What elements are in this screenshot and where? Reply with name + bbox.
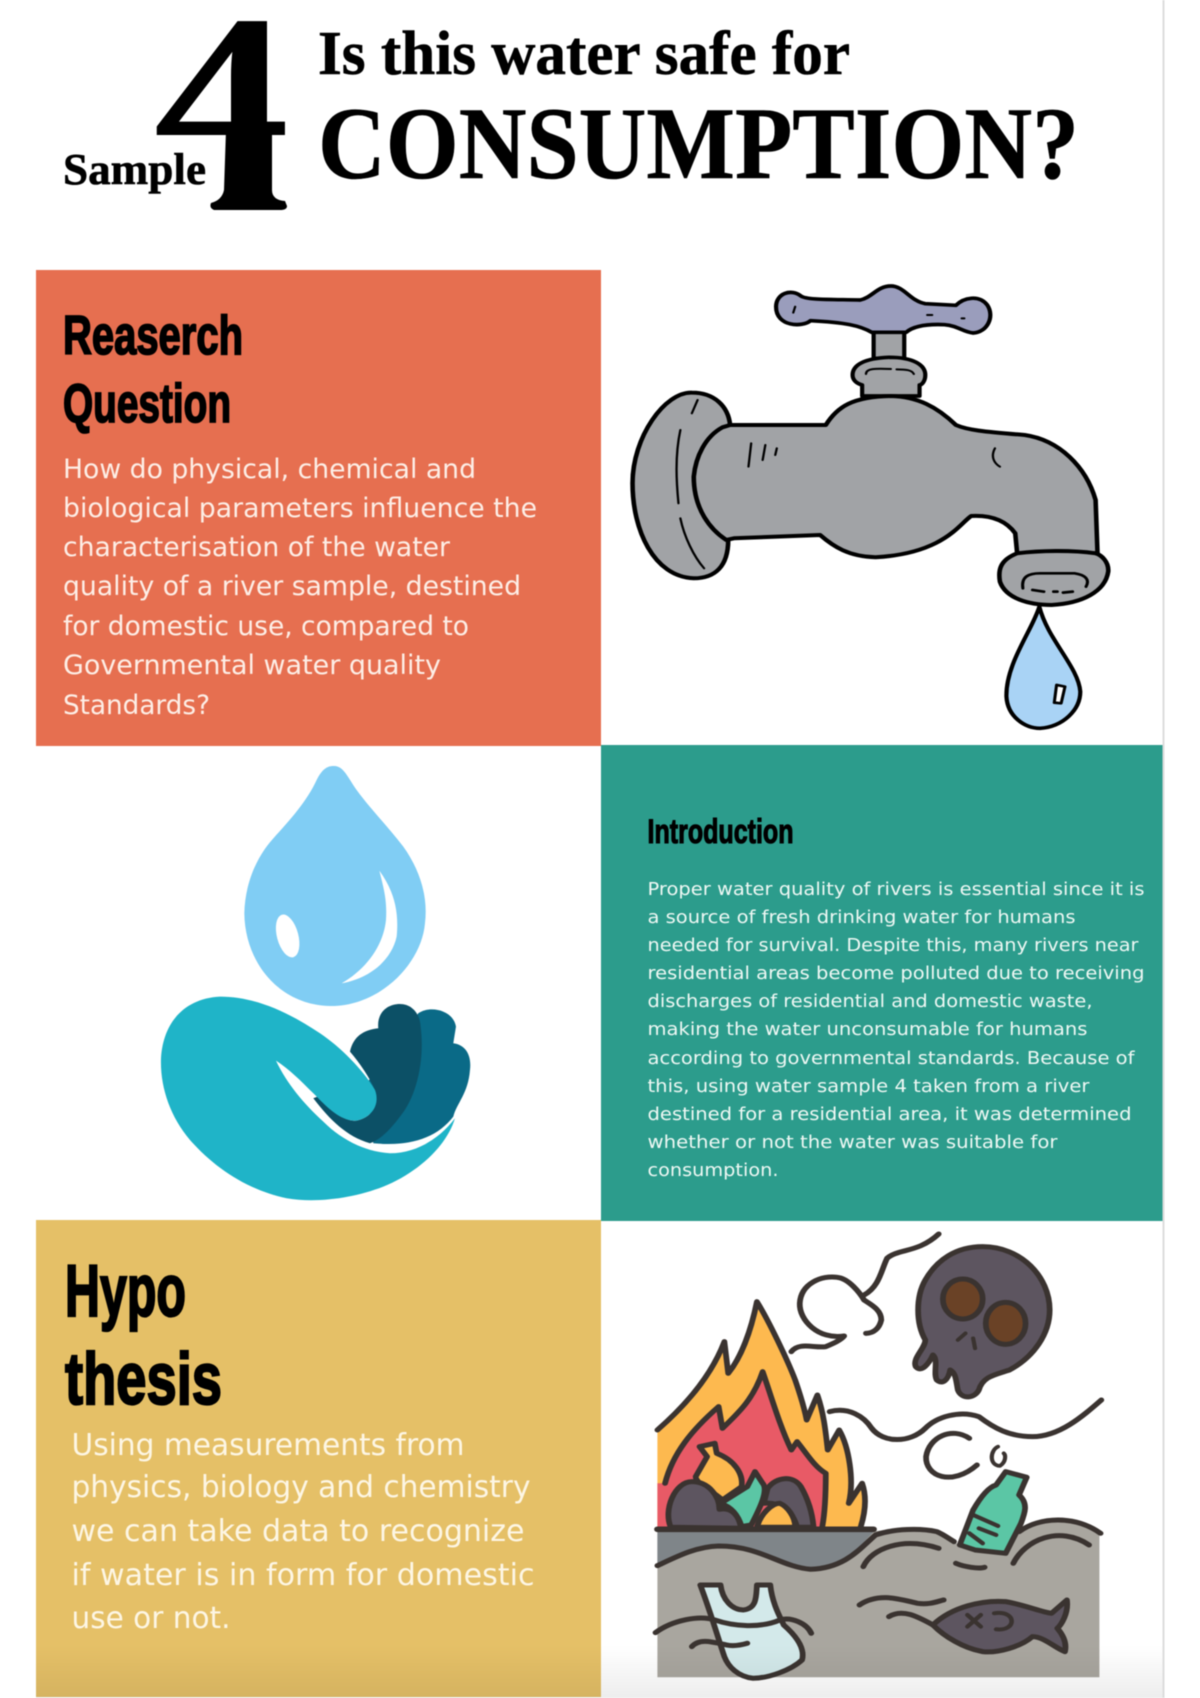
heading: hypothesis: thesis: [65, 1339, 222, 1420]
text block: hypothesis: use or not.: [72, 1601, 230, 1636]
text block: introduction: according to governmental standards. Because of: [648, 1048, 1135, 1069]
icon: water drop over hand: [161, 766, 470, 1200]
text block: hypothesis: [72, 1428, 534, 1636]
text block: introduction: needed for survival. Despite this, many rivers near: [648, 935, 1139, 956]
panel: research question: [36, 270, 601, 746]
text block: introduction: making the water unconsumable for humans: [648, 1019, 1088, 1040]
text block: hypothesis: if water is in form for domestic: [72, 1558, 534, 1593]
label: Sample: Sample: [63, 145, 206, 194]
heading: research question: Question: [63, 372, 231, 434]
polluted water: [657, 1518, 1101, 1677]
icon: dripping tap: [633, 286, 1108, 728]
text block: research question: How do physical, chemical and: [63, 454, 476, 485]
text block: research question: biological parameters influence the: [63, 493, 537, 524]
cupped hand: [161, 997, 470, 1200]
heading: hypothesis: Hypo: [65, 1251, 186, 1332]
panel: introduction: [601, 745, 1162, 1221]
floating bottle: [960, 1472, 1027, 1553]
heading: research question: [63, 304, 243, 434]
text block: introduction: this, using water sample 4 taken from a river: [648, 1076, 1090, 1097]
text block: research question: Governmental water quality: [63, 650, 441, 681]
text block: introduction: whether or not the water was suitable for: [648, 1132, 1058, 1153]
text block: research question: for domestic use, compared to: [63, 611, 469, 642]
text block: research question: [63, 454, 537, 721]
title: [63, 0, 1079, 227]
title line two: CONSUMPTION?: [318, 87, 1079, 201]
text block: introduction: [648, 879, 1144, 1181]
dead fish: [859, 1598, 1067, 1652]
heading: introduction: Introduction: [648, 813, 794, 851]
text block: hypothesis: we can take data to recognize: [72, 1514, 524, 1549]
title line one: Is this water safe for: [318, 20, 850, 88]
text block: introduction: Proper water quality of rivers is essential since it is: [648, 879, 1144, 900]
skull: [915, 1247, 1050, 1397]
heading: research question: Reaserch: [63, 304, 243, 366]
text block: research question: characterisation of the water: [63, 532, 451, 563]
icon: pollution scene: [655, 1234, 1101, 1678]
plastic bag: [655, 1585, 811, 1678]
water drop: [244, 766, 426, 1006]
text block: hypothesis: physics, biology and chemistry: [72, 1470, 530, 1505]
text block: introduction: residential areas become polluted due to receiving: [648, 963, 1144, 984]
text block: introduction: discharges of residential and domestic waste,: [648, 991, 1092, 1012]
text block: introduction: consumption.: [648, 1160, 778, 1181]
text block: introduction: a source of fresh drinking water for humans: [648, 907, 1076, 928]
smoke and bubbles: [791, 1234, 1101, 1477]
text block: hypothesis: Using measurements from: [72, 1428, 464, 1463]
heading: hypothesis: [65, 1251, 222, 1420]
text block: research question: Standards?: [63, 690, 210, 721]
fire with burning waste: [657, 1302, 874, 1530]
panel: hypothesis: [36, 1220, 601, 1697]
text block: research question: quality of a river sample, destined: [63, 571, 521, 602]
text block: introduction: destined for a residential area, it was determined: [648, 1104, 1132, 1125]
